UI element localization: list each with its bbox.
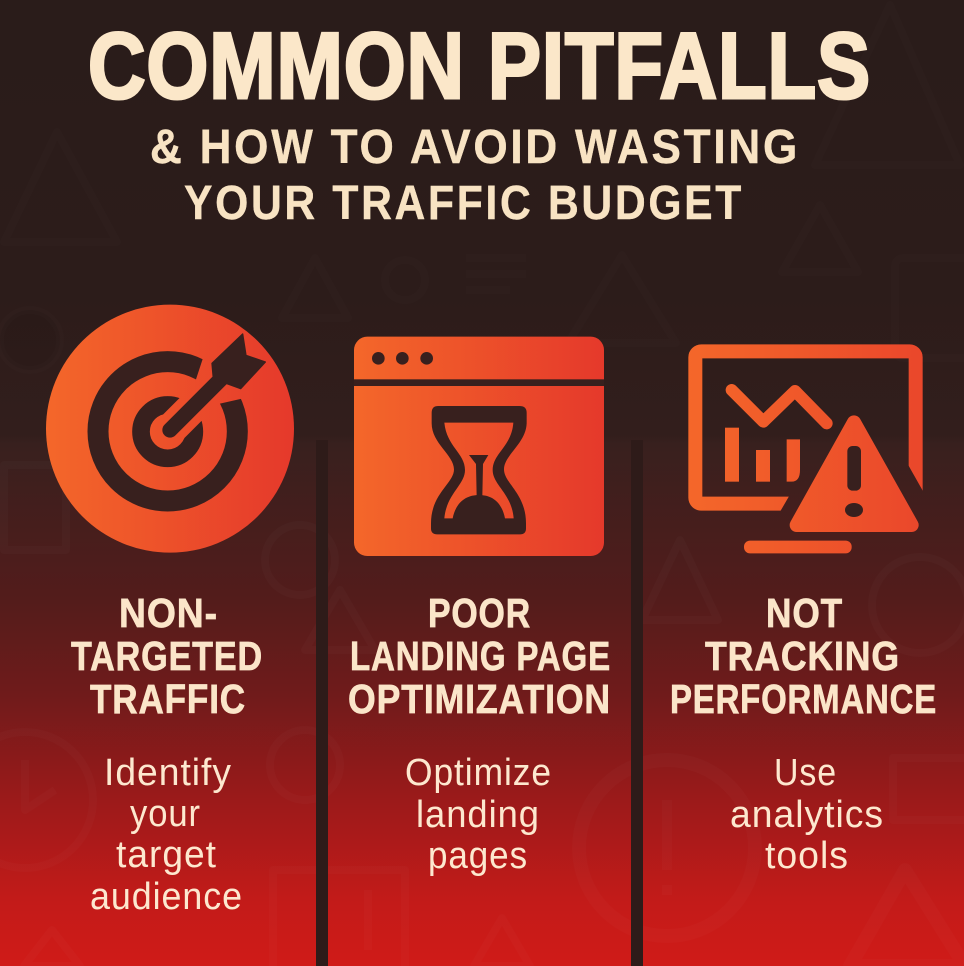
column 3 heading: [670, 590, 937, 722]
column 3 body text: analytics: [730, 794, 884, 836]
icon: browser window with hourglass: [354, 337, 604, 556]
column 2 heading: [348, 590, 611, 722]
title: [88, 13, 871, 230]
column 1 body text: target: [116, 834, 217, 876]
column 3 body text: Use: [774, 752, 837, 794]
icon: target with arrow: [46, 305, 294, 553]
column 1 heading: NON-: [119, 590, 218, 636]
column 2 body text: pages: [428, 835, 528, 877]
column 3 body text: [730, 752, 884, 877]
background watermark icons lower: [0, 465, 964, 966]
column 2 body text: Optimize: [405, 752, 552, 794]
column 1 heading: TARGETED: [71, 633, 263, 679]
column 2 body text: [405, 752, 552, 877]
column 1 heading: TRAFFIC: [90, 676, 246, 722]
column 2 body text: landing: [416, 794, 540, 836]
icon: monitor with falling chart and warning triangle: [695, 351, 916, 553]
background watermark icons upper: [0, 5, 964, 370]
column divider right: [631, 440, 643, 966]
column 1 body text: [90, 752, 243, 918]
subtitle line 1: & HOW TO AVOID WASTING: [150, 121, 800, 174]
column 1 body text: your: [130, 793, 201, 835]
column 2 heading: POOR: [428, 590, 531, 636]
column divider left: [316, 440, 328, 966]
column 2 heading: LANDING PAGE: [350, 633, 611, 679]
column 3 heading: NOT: [766, 590, 843, 636]
column 3 heading: TRACKING: [705, 633, 900, 679]
column 3 body text: tools: [765, 835, 849, 877]
column 1 body text: audience: [90, 876, 243, 918]
subtitle line 2: YOUR TRAFFIC BUDGET: [184, 177, 744, 230]
column 2 heading: OPTIMIZATION: [348, 676, 611, 722]
column 1 body text: Identify: [104, 752, 232, 794]
column 1 heading: [71, 590, 263, 722]
